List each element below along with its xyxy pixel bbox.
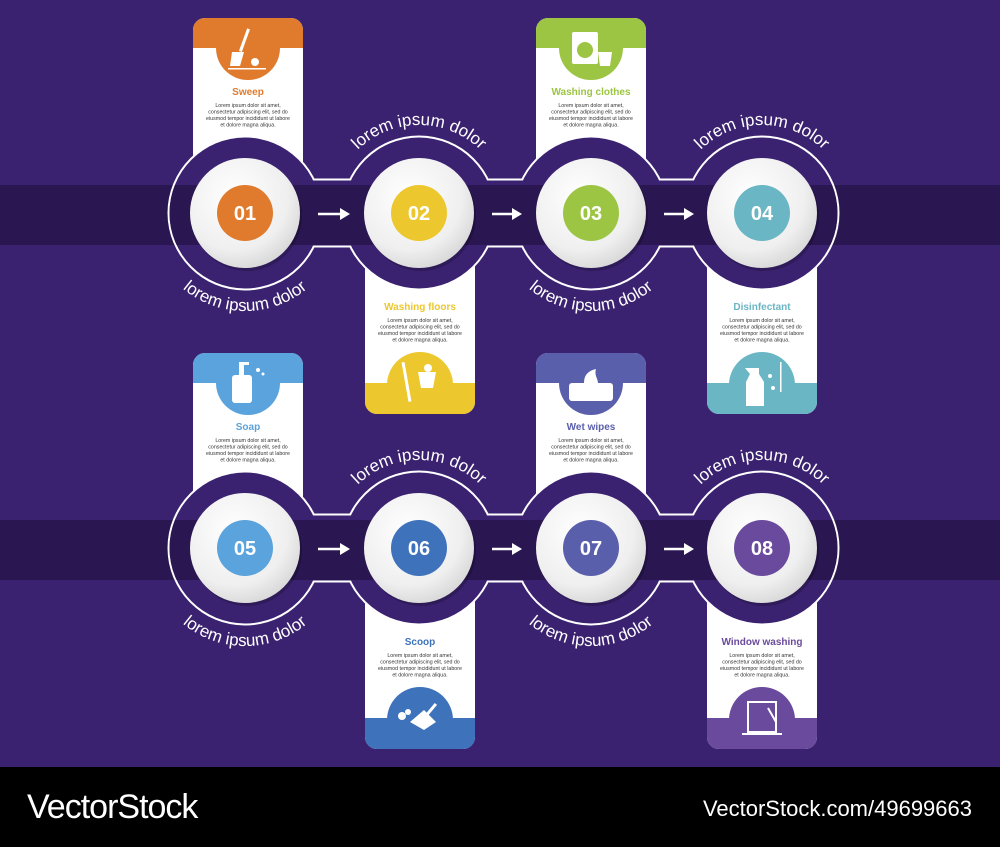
card: 06 Scoop: et dolore magna aliqua. [392, 672, 448, 678]
card: 06 Scoop: eiusmod tempor incididunt ut labore [378, 666, 462, 672]
arc labels: lorem ipsum dolor [183, 280, 306, 314]
card: 02 Washing floors: eiusmod tempor incididunt ut labore [378, 331, 462, 337]
step circles: 08 [751, 538, 773, 560]
arc labels [183, 114, 830, 649]
icon: dustpan [398, 703, 437, 730]
title: Sweep: Sweep [232, 87, 264, 98]
title: Soap: Soap [236, 422, 260, 433]
title: Washing clothes: Washing clothes [551, 87, 631, 98]
card: 01 Sweep [193, 18, 303, 162]
card: 03 Washing clothes [536, 18, 646, 158]
card: 01 Sweep: et dolore magna aliqua. [220, 122, 276, 128]
arc labels: lorem ipsum dolor [529, 280, 652, 314]
title: Scoop: Scoop [405, 637, 435, 648]
icon: mop [402, 362, 436, 402]
card: 08 Window washing: Lorem ipsum dolor sit amet, [729, 653, 795, 659]
card: 04 Disinfectant: et dolore magna aliqua. [734, 338, 790, 344]
card: 05 Soap: Lorem ipsum dolor sit amet, [215, 438, 281, 444]
timeline row 2 [168, 470, 840, 626]
card: 01 Sweep: eiusmod tempor incididunt ut labore [206, 116, 290, 122]
arc labels: lorem ipsum dolor [183, 614, 306, 649]
card: 02 Washing floors: Lorem ipsum dolor sit amet, [387, 318, 453, 324]
card: 06 Scoop [365, 602, 475, 749]
step circles: 05 [234, 538, 256, 560]
footer [0, 767, 1000, 847]
card: 08 Window washing: et dolore magna aliqua. [734, 672, 790, 678]
icon: broom [228, 28, 266, 70]
step circles: 02 [408, 203, 430, 225]
card: 02 Washing floors: et dolore magna aliqua. [392, 338, 448, 344]
card: 07 Wet wipes: eiusmod tempor incididunt ut labore [549, 451, 633, 457]
card: 08 Window washing: consectetur adipiscing elit, sed do [722, 660, 802, 666]
card: 08 Window washing: eiusmod tempor incididunt ut labore [720, 666, 804, 672]
card: 02 Washing floors [365, 266, 475, 414]
step circles: 04 [751, 203, 774, 225]
icon: washing machine [572, 32, 612, 66]
card: 04 Disinfectant [707, 268, 817, 414]
card: 07 Wet wipes: et dolore magna aliqua. [563, 458, 619, 464]
card: 01 Sweep: Lorem ipsum dolor sit amet, [215, 103, 281, 109]
card: 05 Soap: eiusmod tempor incididunt ut labore [206, 451, 290, 457]
icon: spray [745, 362, 782, 406]
footer: VectorStock.com/49699663 [703, 796, 972, 821]
card: 04 Disinfectant: Lorem ipsum dolor sit amet, [729, 318, 795, 324]
icon: window [742, 702, 782, 734]
card: 03 Washing clothes: Lorem ipsum dolor sit amet, [558, 103, 624, 109]
arc labels: lorem ipsum dolor [693, 114, 830, 149]
card: 05 Soap [193, 353, 303, 497]
card: 04 Disinfectant: eiusmod tempor incididunt ut labore [720, 331, 804, 337]
arrows [318, 208, 694, 555]
card: 07 Wet wipes: consectetur adipiscing elit, sed do [551, 444, 631, 450]
card: 03 Washing clothes: consectetur adipiscing elit, sed do [551, 110, 631, 116]
arc labels: lorem ipsum dolor [529, 614, 652, 649]
title: Window washing: Window washing [721, 637, 803, 648]
card: 07 Wet wipes: Lorem ipsum dolor sit amet, [558, 438, 624, 444]
icon: soap dispenser [232, 362, 264, 403]
card: 02 Washing floors: consectetur adipiscing elit, sed do [380, 324, 460, 330]
card: 04 Disinfectant: consectetur adipiscing elit, sed do [722, 324, 802, 330]
card: 06 Scoop: consectetur adipiscing elit, sed do [380, 660, 460, 666]
title: Disinfectant: Disinfectant [733, 302, 791, 313]
card: 01 Sweep: consectetur adipiscing elit, sed do [208, 110, 288, 116]
title: Washing floors: Washing floors [384, 302, 456, 313]
card: 07 Wet wipes [536, 353, 646, 494]
footer: VectorStock [27, 788, 199, 826]
step circles: 01 [234, 203, 256, 225]
arc labels: lorem ipsum dolor [350, 114, 486, 149]
step circles: 07 [580, 538, 602, 560]
card: 05 Soap: consectetur adipiscing elit, sed do [208, 444, 288, 450]
step circles: 03 [580, 203, 602, 225]
arc labels: lorem ipsum dolor [693, 450, 830, 484]
card: 03 Washing clothes: eiusmod tempor incididunt ut labore [549, 116, 633, 122]
card: 03 Washing clothes: et dolore magna aliqua. [563, 122, 619, 128]
arc labels: lorem ipsum dolor [350, 450, 486, 484]
timeline row 1 [168, 136, 840, 290]
step circles [190, 158, 819, 606]
card: 05 Soap: et dolore magna aliqua. [220, 458, 276, 464]
icon: wipes box [569, 369, 613, 401]
title: Wet wipes: Wet wipes [567, 422, 616, 433]
step circles: 06 [408, 538, 430, 560]
card: 06 Scoop: Lorem ipsum dolor sit amet, [387, 653, 453, 659]
card: 08 Window washing [707, 602, 817, 749]
